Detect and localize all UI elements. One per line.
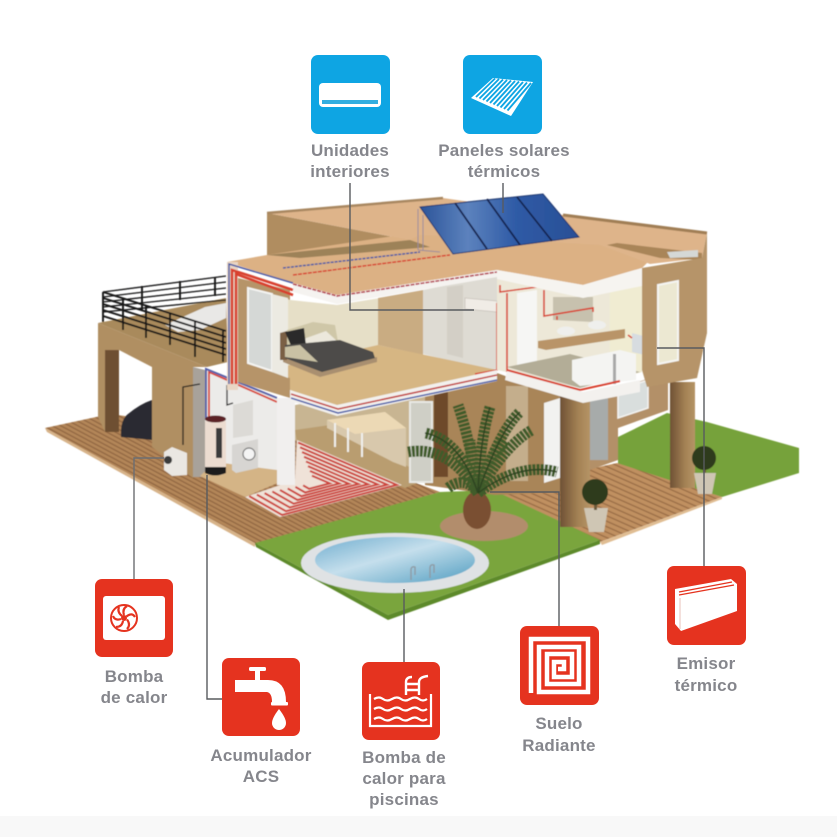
rear right wall bbox=[590, 372, 668, 470]
dark wall bbox=[434, 392, 448, 477]
air conditioning indoor unit bbox=[465, 298, 497, 312]
potted plant front bbox=[582, 479, 608, 532]
leader line: acumulador bbox=[207, 475, 222, 699]
bedroom floor slab bbox=[290, 370, 497, 416]
kitchen counter bbox=[327, 412, 406, 467]
main roof bbox=[227, 232, 662, 295]
right upper wall window bbox=[667, 250, 698, 258]
label: acumulador acs: ACS bbox=[243, 767, 279, 786]
bed bbox=[280, 322, 377, 377]
ceiling slab bedroom bbox=[293, 270, 497, 304]
ceiling slab bathroom bbox=[497, 268, 642, 298]
icon: indoor unit bbox=[311, 55, 390, 134]
floor slab pipes bbox=[291, 375, 497, 413]
icon: thermal emitter bbox=[667, 566, 746, 645]
wall pipe riser bbox=[227, 262, 293, 390]
upper block wall bbox=[267, 213, 410, 258]
thermal emitter bbox=[632, 333, 658, 358]
bathroom right wall bbox=[610, 285, 642, 380]
bathroom floor pipe bbox=[507, 370, 620, 390]
curtain bbox=[272, 294, 288, 378]
label: unidades interiores: interiores bbox=[310, 162, 390, 181]
white door bbox=[544, 398, 560, 483]
radiant floor bbox=[245, 440, 402, 517]
label: bomba de calor: de calor bbox=[101, 688, 168, 707]
rear window bbox=[618, 380, 648, 418]
bedroom floor bbox=[277, 345, 497, 407]
front bedroom wall bbox=[238, 278, 290, 398]
utility room floor bbox=[200, 462, 280, 497]
potted plant rear bbox=[692, 446, 716, 494]
side glass bbox=[590, 398, 608, 460]
label: bomba de calor para piscinas: piscinas bbox=[369, 790, 439, 809]
bar stools bbox=[335, 423, 362, 457]
label: suelo radiante: Radiante bbox=[522, 736, 596, 755]
right wall block bbox=[642, 233, 707, 387]
house scene illustration bbox=[45, 194, 799, 620]
window panel bbox=[506, 386, 528, 481]
leader line: bomba de calor bbox=[134, 458, 164, 579]
terrace railing bbox=[103, 276, 226, 362]
bedroom pipe bbox=[475, 303, 497, 378]
inner parapet bbox=[607, 243, 702, 260]
leader line: suelo radiante bbox=[490, 492, 559, 626]
bedroom back wall bbox=[272, 298, 380, 370]
bathroom back wall bbox=[497, 276, 642, 388]
solar panel bbox=[418, 194, 579, 254]
car bbox=[121, 400, 152, 440]
upper block wall shadow bbox=[267, 240, 430, 258]
palm tree bbox=[408, 405, 557, 529]
icon: water tap bbox=[222, 658, 300, 736]
bathroom floor bbox=[507, 354, 640, 388]
roof parapet top bbox=[267, 198, 443, 213]
utility room column bbox=[193, 367, 205, 477]
roof pipes bbox=[283, 252, 450, 275]
mulch bed bbox=[440, 511, 528, 541]
column rear bbox=[670, 382, 695, 488]
upper roof bbox=[267, 198, 707, 264]
glass door bbox=[410, 402, 432, 482]
column front bbox=[560, 396, 590, 527]
wooden deck left bbox=[45, 414, 440, 547]
vanity bbox=[538, 320, 625, 350]
label: unidades interiores: Unidades bbox=[311, 141, 389, 160]
label: paneles solares: Paneles solares bbox=[438, 141, 570, 160]
bathtub bbox=[572, 350, 636, 386]
wooden deck right bbox=[493, 463, 722, 545]
label: emisor termico: térmico bbox=[675, 676, 737, 695]
bedroom window bbox=[248, 288, 272, 371]
label: paneles solares: térmicos bbox=[468, 162, 540, 181]
leader line: piscina bbox=[403, 589, 405, 662]
leader line: emisor bbox=[657, 348, 704, 566]
icon: heat pump bbox=[95, 579, 173, 657]
roof parapet right bbox=[563, 215, 707, 233]
front lawn bbox=[255, 490, 600, 620]
label: bomba de calor para piscinas: Bomba de bbox=[362, 748, 446, 767]
wall boiler bbox=[233, 400, 253, 438]
washing machine bbox=[232, 439, 258, 473]
bathroom pipes bbox=[500, 285, 632, 372]
bedroom side wall bbox=[423, 275, 497, 372]
bathroom floor slab bbox=[505, 370, 640, 403]
ceiling slab pipes bbox=[293, 272, 497, 296]
terrace lounger bbox=[165, 303, 226, 332]
icon: solar panels bbox=[463, 55, 542, 134]
bedroom inner door bbox=[447, 285, 463, 358]
carport wall bbox=[98, 323, 207, 478]
swimming pool bbox=[301, 533, 489, 593]
label: acumulador acs: Acumulador bbox=[210, 746, 312, 765]
right wall window bbox=[658, 281, 678, 364]
bathroom mirror bbox=[553, 297, 593, 322]
utility room wall bbox=[205, 370, 277, 478]
pool ladder bbox=[411, 565, 434, 580]
label: bomba de calor para piscinas: calor para bbox=[362, 769, 446, 788]
carport pillar bbox=[105, 350, 119, 432]
kitchen floor bbox=[295, 425, 430, 488]
bathroom door bbox=[517, 290, 537, 366]
label: suelo radiante: Suelo bbox=[535, 714, 583, 733]
white pillar bbox=[277, 398, 295, 485]
ground floor rear wall bbox=[425, 373, 560, 495]
label: emisor termico: Emisor bbox=[677, 654, 736, 673]
heat pump outdoor unit bbox=[164, 447, 187, 476]
water tank bbox=[205, 416, 226, 476]
carport terrace floor bbox=[98, 298, 228, 367]
back lawn bbox=[618, 413, 799, 497]
kitchen back wall bbox=[295, 380, 430, 485]
icon: pool bbox=[362, 662, 440, 740]
utility pipes bbox=[183, 369, 277, 445]
leader line: unidades interiores bbox=[350, 183, 474, 310]
label: bomba de calor: Bomba bbox=[105, 667, 164, 686]
leader line: paneles solares bbox=[502, 183, 504, 213]
wardrobe bbox=[378, 290, 423, 355]
icon: radiant floor bbox=[520, 626, 599, 705]
